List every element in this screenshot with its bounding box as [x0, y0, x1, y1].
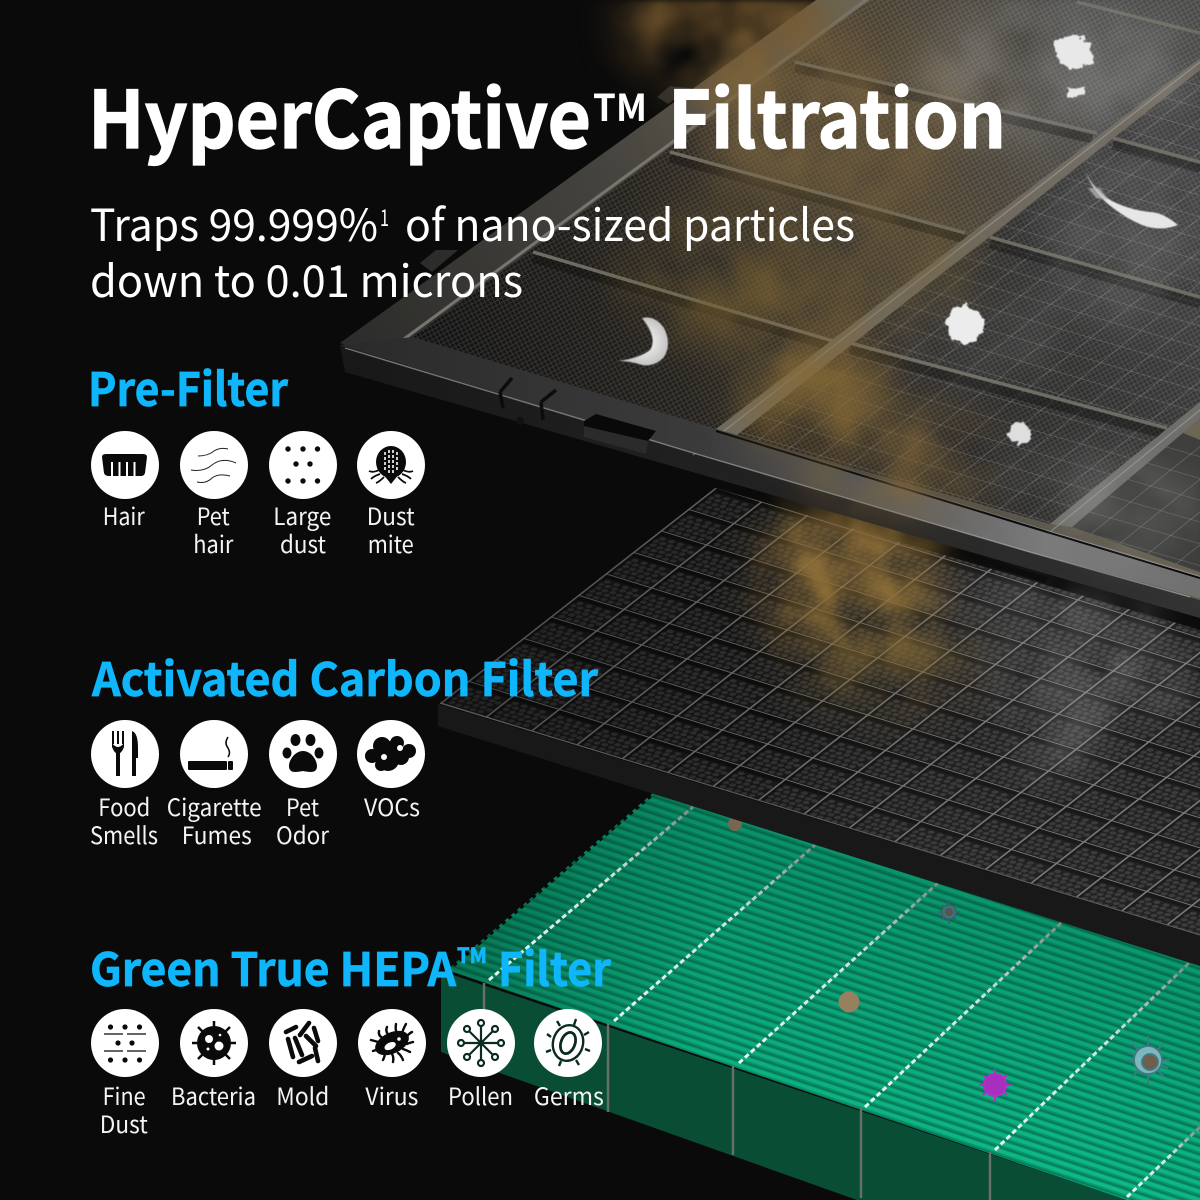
- panel: pre-filter: [88, 354, 425, 560]
- smoke over pre-filter brown: [630, 0, 990, 505]
- heading: green true HEPA filter: Green True HEPA: [90, 934, 456, 1000]
- smoke between filters: [760, 495, 1200, 775]
- label: pet hair: hair: [193, 525, 234, 560]
- label: pet odor: Pet: [286, 788, 319, 823]
- feather right: [1085, 170, 1178, 228]
- pre-filter frame: [340, 0, 1200, 618]
- heading: activated carbon filter: Activated Carbon Filter: [91, 644, 599, 710]
- particle: purple germ: [979, 1069, 1011, 1101]
- HEPA front dividers: [484, 983, 990, 1200]
- label: dust mite: mite: [368, 525, 414, 560]
- particle: small brown: [728, 817, 742, 831]
- HEPA pleated top: [447, 793, 1200, 1200]
- label: dust mite: Dust: [367, 497, 415, 532]
- icon: large dust: [269, 431, 337, 499]
- mesh cell field left: [413, 0, 1200, 429]
- subtitle: of nano-sized particles: [405, 190, 855, 254]
- dust clump top: [1053, 35, 1095, 96]
- label: cigarette fumes: Fumes: [182, 816, 252, 851]
- icon: mold: [269, 1009, 337, 1077]
- label: germs: Germs: [534, 1077, 604, 1112]
- label: fine dust: Dust: [100, 1105, 148, 1140]
- dust clump low: [1009, 422, 1031, 444]
- label: hair: Hair: [103, 497, 145, 532]
- heading: green true HEPA filter: TM: [457, 940, 487, 970]
- dust clump mid: [946, 306, 984, 344]
- rail highlights: [693, 62, 1200, 532]
- activated carbon filter: [438, 488, 1200, 966]
- label: large dust: [273, 497, 331, 560]
- label: fine dust: [100, 1077, 148, 1140]
- icon: VOCs cloud: [357, 720, 425, 788]
- label: pet hair: [193, 497, 234, 560]
- label: food smells: Food: [98, 788, 150, 823]
- panel: green true HEPA filter: [90, 934, 612, 1140]
- subtitle: down to 0.01 microns: [90, 246, 523, 310]
- heading: pre-filter: Pre-Filter: [88, 354, 289, 420]
- frame rail base: [340, 0, 1200, 600]
- HEPA front face: [441, 971, 1127, 1200]
- icon: cigarette: [180, 720, 248, 788]
- label: pet odor: [276, 788, 330, 851]
- carbon grid surface: [440, 488, 1200, 935]
- label: pollen: Pollen: [448, 1077, 513, 1112]
- crossbar shadows: [533, 68, 1200, 435]
- label: food smells: [90, 788, 158, 851]
- icon: dust mite: [357, 431, 425, 499]
- icon: germs: [534, 1009, 602, 1077]
- mesh cell field centre: [737, 70, 1200, 524]
- label: cigarette fumes: Cigarette: [167, 788, 262, 823]
- frame slot right: [992, 561, 1048, 583]
- heading: green true HEPA filter: Filter: [498, 934, 612, 1000]
- label: VOCs: VOCs: [364, 788, 420, 823]
- title: Filtration: [668, 56, 1006, 171]
- title: TM: [593, 78, 647, 132]
- label: pet hair: Pet: [197, 497, 230, 532]
- centre rail: [716, 58, 1200, 435]
- icon: hair comb: [91, 431, 159, 499]
- HEPA separators: [489, 807, 1200, 1197]
- icon: paw: [269, 720, 337, 788]
- title: HyperCaptive: [88, 56, 591, 171]
- frame front top face: [340, 337, 1200, 598]
- icon: pollen: [447, 1009, 515, 1077]
- crossbars: [533, 2, 1200, 428]
- label: dust mite: [367, 497, 415, 560]
- icon: virus: [358, 1009, 426, 1077]
- panel: activated carbon filter: [90, 644, 599, 851]
- frame clip details: [500, 378, 656, 454]
- label: food smells: Smells: [90, 816, 158, 851]
- particle: brown pollen: [838, 992, 860, 1012]
- icon: fork and knife: [91, 720, 159, 788]
- mesh cell field right: [1072, 433, 1200, 572]
- title: [88, 56, 1006, 171]
- particle: teal virus: [938, 900, 960, 924]
- frame tabs: [420, 86, 690, 272]
- label: virus: Virus: [365, 1077, 418, 1112]
- frame inner lip: [404, 0, 870, 339]
- green HEPA filter: [441, 793, 1200, 1200]
- label: pet odor: Odor: [276, 816, 330, 851]
- label: large dust: Large: [273, 497, 331, 532]
- carbon front band: [438, 704, 1200, 966]
- icon: fine dust: [91, 1009, 159, 1077]
- icon: pet hair: [180, 431, 248, 499]
- smoke over pre-filter grey: [890, 0, 1200, 550]
- subtitle: 1: [380, 199, 389, 233]
- label: fine dust: Fine: [103, 1077, 146, 1112]
- frame highlight lines: [345, 348, 1200, 597]
- subtitle: Traps 99.999%: [90, 190, 378, 254]
- particle: large teal germ: [1126, 1036, 1170, 1084]
- label: large dust: dust: [280, 525, 326, 560]
- frame side face: [340, 345, 1200, 618]
- icon: bacteria: [180, 1009, 248, 1077]
- label: cigarette fumes: [167, 788, 262, 851]
- feather left: [618, 317, 668, 365]
- label: mold: Mold: [276, 1077, 329, 1112]
- label: bacteria: Bacteria: [171, 1077, 256, 1112]
- subtitle: [90, 190, 855, 310]
